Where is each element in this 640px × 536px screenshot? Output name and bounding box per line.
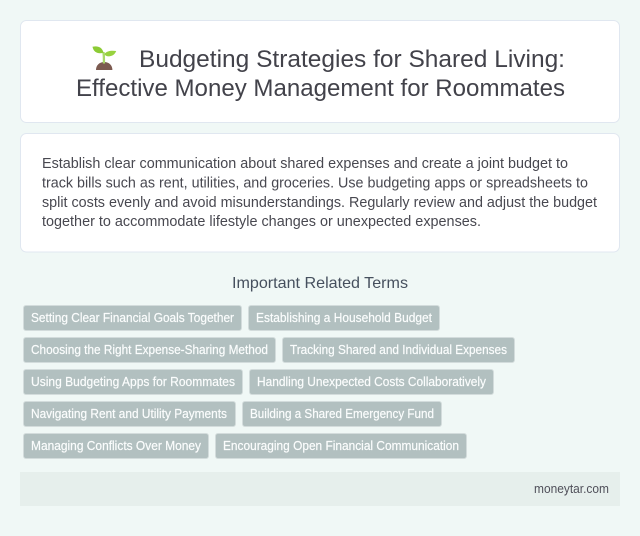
tag: setting goals: Setting Clear Financial Goals Together bbox=[31, 311, 234, 325]
title bbox=[76, 46, 565, 102]
footer bbox=[20, 472, 620, 506]
title: Effective Money Management for Roommates bbox=[76, 75, 565, 102]
tag: rent and utility: Navigating Rent and Utility Payments bbox=[31, 407, 227, 421]
panel: description bbox=[20, 134, 620, 252]
tag: budgeting apps bbox=[24, 370, 242, 394]
tag list bbox=[24, 306, 514, 458]
tag: setting goals bbox=[24, 306, 242, 330]
panel: title card bbox=[20, 20, 620, 122]
tag: budgeting apps: Using Budgeting Apps for Roommates bbox=[31, 375, 235, 389]
tag: conflicts bbox=[24, 434, 208, 458]
text block: description: together to accommodate lifestyle changes or unexpected expenses. bbox=[42, 214, 481, 230]
tag: expense-sharing method: Choosing the Right Expense-Sharing Method bbox=[31, 343, 268, 357]
text block: description: track bills such as rent, utilities, and groceries. Use budgeting apps or spreadsheets to bbox=[42, 176, 588, 192]
tag: tracking expenses bbox=[282, 338, 514, 362]
tag: emergency fund bbox=[242, 402, 442, 426]
text block: description bbox=[42, 156, 597, 230]
tag: expense-sharing method bbox=[24, 338, 276, 362]
tag: unexpected costs: Handling Unexpected Costs Collaboratively bbox=[257, 375, 487, 389]
text block: description: split costs evenly and avoid misunderstandings. Regularly review and adjust the budget bbox=[42, 195, 597, 211]
title: Budgeting Strategies for Shared Living: bbox=[139, 46, 565, 73]
tag: open communication: Encouraging Open Financial Communication bbox=[223, 439, 459, 453]
tag: unexpected costs bbox=[250, 370, 494, 394]
footer text: site name: moneytar.com bbox=[534, 482, 609, 496]
tag: open communication bbox=[216, 434, 466, 458]
icon: sprout bbox=[92, 46, 116, 70]
tag: household budget bbox=[248, 306, 440, 330]
heading: important related terms: Important Related Terms bbox=[232, 275, 408, 292]
tag: household budget: Establishing a Household Budget bbox=[256, 311, 433, 325]
text block: description: Establish clear communication about shared expenses and create a joint budget to bbox=[42, 156, 568, 172]
tag: emergency fund: Building a Shared Emergency Fund bbox=[250, 407, 434, 421]
tag: tracking expenses: Tracking Shared and Individual Expenses bbox=[290, 343, 507, 357]
tag: rent and utility bbox=[24, 402, 236, 426]
tag: conflicts: Managing Conflicts Over Money bbox=[31, 439, 202, 453]
